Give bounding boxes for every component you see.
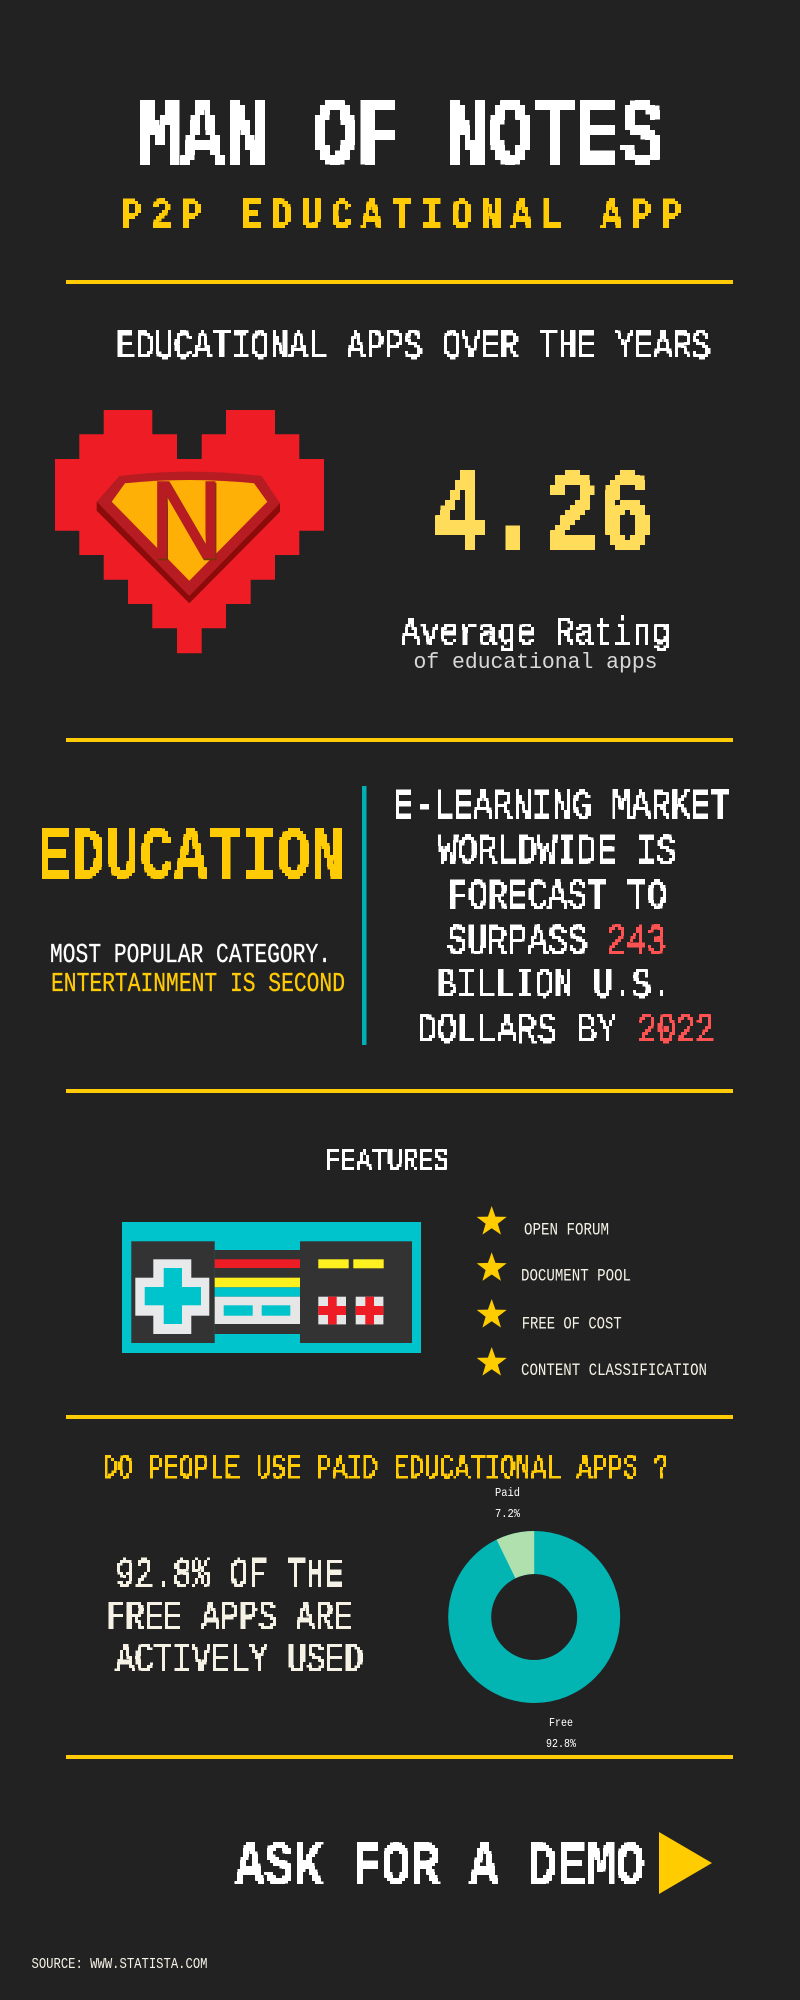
feature: document pool xyxy=(477,1252,631,1286)
stat: average rating xyxy=(401,426,671,675)
panel: e-learning forecast: WORLDWIDE IS xyxy=(438,828,676,876)
panel: e-learning forecast: BILLION U.S. xyxy=(437,962,671,1010)
feature: free of cost xyxy=(477,1299,622,1334)
donut: paid segment xyxy=(497,1531,534,1578)
category note line 2: ENTERTAINMENT IS SECOND xyxy=(51,970,345,1000)
call to action text: ASK FOR A DEMO xyxy=(235,1832,645,1903)
panel: most popular category xyxy=(37,817,345,1000)
rating label: Average Rating xyxy=(401,612,671,656)
panel: e-learning forecast: 2022 xyxy=(638,1007,714,1055)
feature: document pool: DOCUMENT POOL xyxy=(521,1266,631,1286)
rating sublabel: of educational apps xyxy=(414,650,658,675)
feature: content classification xyxy=(477,1347,707,1381)
feature: free of cost: FREE OF COST xyxy=(522,1314,622,1334)
panel: e-learning forecast: FORECAST TO xyxy=(448,873,667,921)
donut chart xyxy=(470,1486,599,1751)
pixel heart xyxy=(55,410,324,653)
panel: e-learning forecast xyxy=(394,783,730,1055)
panel: e-learning forecast: DOLLARS BY xyxy=(417,1007,617,1055)
chart value: paid: 7.2% xyxy=(495,1507,521,1521)
feature: open forum: OPEN FORUM xyxy=(524,1220,609,1240)
text block: free apps: 92.8% OF THE xyxy=(116,1553,344,1599)
text block: free apps: FREE APPS ARE xyxy=(106,1596,352,1642)
rating number: . xyxy=(484,426,544,596)
heading: features: FEATURES xyxy=(326,1143,448,1180)
subtitle: P2P EDUCATIONAL APP xyxy=(121,192,691,241)
panel: e-learning forecast: SURPASS xyxy=(447,918,588,966)
feature: content classification: CONTENT CLASSIFICATION xyxy=(521,1361,707,1381)
education headline: EDUCATION xyxy=(37,817,345,901)
chart label: paid: Paid xyxy=(495,1486,520,1500)
text block: free apps: ACTIVELY USED xyxy=(116,1638,364,1684)
donut: free segment xyxy=(470,1552,599,1682)
shield xyxy=(97,459,280,603)
call to action xyxy=(235,1832,712,1903)
shield: N xyxy=(150,460,224,584)
source note: SOURCE: WWW.STATISTA.COM xyxy=(32,1956,208,1973)
header xyxy=(121,86,691,241)
shield letter: N xyxy=(150,459,223,582)
rating number: 26 xyxy=(544,453,654,586)
rating number: 4 xyxy=(432,453,487,586)
category note line 1: MOST POPULAR CATEGORY. xyxy=(50,941,331,971)
feature: open forum xyxy=(477,1206,609,1240)
panel: e-learning forecast: 243 xyxy=(606,918,666,966)
feature list xyxy=(477,1206,707,1381)
text block: free apps xyxy=(106,1553,364,1684)
rating number xyxy=(432,426,654,596)
icon: pixel heart with N shield xyxy=(55,410,324,653)
arrow xyxy=(659,1832,712,1894)
chart value: free: 92.8% xyxy=(546,1737,577,1751)
heading: paid apps question: DO PEOPLE USE PAID EDUCATIONAL APPS ? xyxy=(102,1451,669,1488)
divider: teal xyxy=(362,786,366,1045)
title: MAN OF NOTES xyxy=(137,86,664,192)
chart label: free: Free xyxy=(549,1716,573,1730)
icon: game controller xyxy=(122,1222,421,1353)
